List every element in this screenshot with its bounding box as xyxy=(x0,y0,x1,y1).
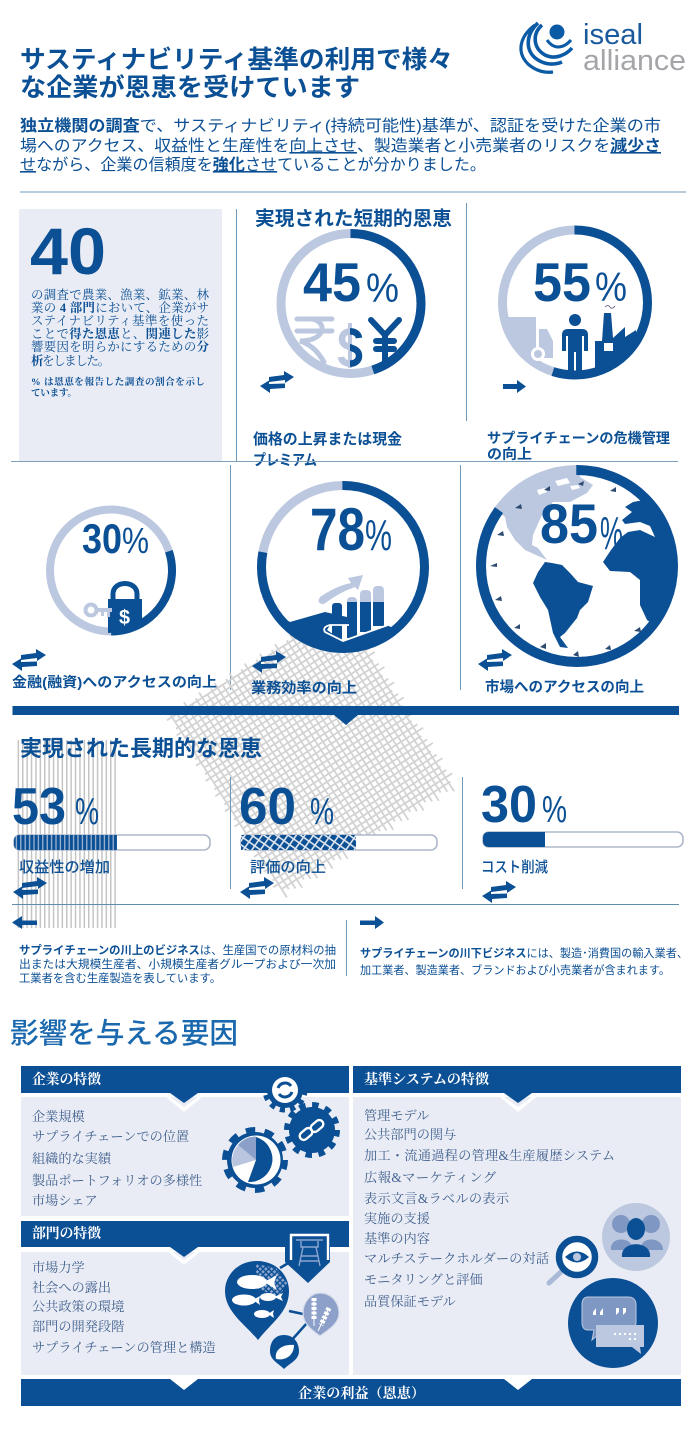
footer banner: company benefits xyxy=(21,1379,681,1406)
list: サプライチェーンの管理と構造 xyxy=(32,1339,216,1355)
icon: lock and key: $ xyxy=(119,607,130,629)
percent note xyxy=(31,376,205,399)
list xyxy=(32,1259,216,1355)
panel: standards system characteristics xyxy=(353,1066,681,1375)
text: upstream definition xyxy=(19,943,336,985)
intro text: 独立機関の調査 で、サスティナビリティ(持続可能性)基準が、認証を受けた企業の市 xyxy=(20,116,661,135)
stat: 60 percent reputation: % xyxy=(310,791,334,833)
chart: 55 percent xyxy=(500,230,648,380)
label: price premium: 価格の上昇または現金 xyxy=(253,430,402,448)
text: upstream definition: 出または大規模生産者、小規模生産者グループおよび一次加 xyxy=(19,957,336,971)
logo: iseal alliance: alliance xyxy=(583,45,686,77)
stat: 60 percent reputation: 60 xyxy=(239,778,296,836)
chart: 45 percent: % xyxy=(366,265,399,311)
study description xyxy=(31,287,210,368)
arrow: downstream xyxy=(360,916,384,929)
label: market access: 市場へのアクセスの向上 xyxy=(485,678,644,696)
header: 企業の特徴 xyxy=(32,1071,101,1088)
text: downstream definition: 加工業者、製造業者、ブランドおよび小売業者が含まれます。 xyxy=(360,963,670,977)
icon: sector pins xyxy=(225,1235,339,1369)
stat: 60 percent reputation: 評価の向上 xyxy=(250,859,326,876)
map: arctic islands xyxy=(537,478,580,495)
stat: 53 percent profitability: % xyxy=(75,791,99,833)
decorative grid: vertical lines xyxy=(17,740,117,928)
map: africa and europe xyxy=(603,500,668,622)
list xyxy=(364,1108,615,1309)
arrow: both directions xyxy=(478,649,512,671)
chart: 45 percent: 45 xyxy=(303,251,361,313)
label: operational efficiency: 業務効率の向上 xyxy=(251,679,357,697)
text: downstream definition: サプライチェーンの川下ビジネスには、製造･消費国の輸入業者、 xyxy=(360,946,688,960)
text: upstream definition: サプライチェーンの川上のビジネスは、生産国での原材料の抽 xyxy=(19,943,336,957)
logo: iseal alliance xyxy=(521,19,686,77)
label: price premium: プレミアム xyxy=(253,452,317,469)
icon: speech bubbles xyxy=(568,1278,658,1368)
chart: 78 percent xyxy=(262,486,430,670)
list: 製品ポートフォリオの多様性 xyxy=(32,1172,202,1188)
stat: 30 percent cost reduction xyxy=(481,776,683,876)
arrow: both directions xyxy=(13,877,47,899)
list: 市場シェア xyxy=(32,1192,98,1208)
label: supply chain risk xyxy=(487,430,670,462)
arrow: both directions xyxy=(252,651,286,673)
intro text: せながら、企業の信頼度を強化させていることが分かりました。 xyxy=(20,156,486,174)
label: price premium xyxy=(253,430,402,469)
label: supply chain risk: の向上 xyxy=(487,446,532,462)
arrow: downstream xyxy=(503,380,526,393)
list: 公共政策の環境 xyxy=(32,1298,124,1314)
study description: ことで得た恩恵と、関連した影 xyxy=(31,326,210,341)
study description: の調査で農業、漁業、鉱業、林 xyxy=(31,287,210,302)
list: 市場力学 xyxy=(32,1259,85,1275)
header: 部門の特徴 xyxy=(32,1225,101,1242)
study description: 響要因を明らかにするための分 xyxy=(31,339,210,354)
map: markers xyxy=(490,481,641,657)
list: 社会への露出 xyxy=(32,1280,111,1295)
map: north america xyxy=(502,475,593,560)
chart: 30 percent xyxy=(34,494,188,647)
icon: stakeholders xyxy=(602,1203,670,1271)
text: downstream definition xyxy=(360,946,688,977)
intro text: 場へのアクセス、収益性と生産性を 向上させ、製造業者と小売業者のリスクを 減少さ xyxy=(20,137,661,155)
chart: 45 percent xyxy=(281,234,421,374)
title: な企業が恩恵を受けています xyxy=(20,73,360,102)
icon: hand and growth bars xyxy=(287,575,392,644)
arrow: both directions xyxy=(240,877,274,899)
list: 広報&マーケティング xyxy=(364,1169,497,1185)
list xyxy=(32,1108,202,1208)
footer banner: company benefits: 企業の利益（恩恵） xyxy=(298,1385,425,1402)
chart: 85 percent globe: % xyxy=(600,507,623,559)
list: 品質保証モデル xyxy=(364,1294,456,1309)
list: 企業規模 xyxy=(32,1108,85,1124)
stat: 53 percent profitability xyxy=(12,778,210,876)
label: supply chain risk: サプライチェーンの危機管理 xyxy=(487,430,670,446)
panel: 40 studies xyxy=(19,209,222,462)
heading: influencing factors: 影響を与える要因 xyxy=(10,1018,238,1050)
list: 実施の支援 xyxy=(364,1210,430,1226)
list: 部門の開発段階 xyxy=(32,1318,124,1334)
logo: iseal alliance: iseal xyxy=(583,19,643,51)
intro text xyxy=(20,116,661,174)
arrow: both directions xyxy=(12,649,46,671)
stat: 53 percent profitability: 53 xyxy=(12,778,66,836)
icon: lock and key xyxy=(86,584,142,633)
number 40: 40 xyxy=(30,214,106,288)
header: 基準システムの特徴 xyxy=(364,1071,489,1088)
percent note: ています。 xyxy=(31,388,77,399)
list: 加工・流通過程の管理&生産履歴システム xyxy=(364,1147,615,1163)
stat: 53 percent profitability: 収益性の増加 xyxy=(19,858,110,876)
list: マルチステークホルダーの対話 xyxy=(364,1250,549,1266)
arrow: upstream xyxy=(12,916,37,929)
list: モニタリングと評価 xyxy=(364,1272,483,1287)
list: サプライチェーンでの位置 xyxy=(32,1129,189,1144)
chart: 30 percent: 30 xyxy=(82,515,122,562)
icon: gears xyxy=(225,1070,337,1190)
chart: 78 percent: 78 xyxy=(310,496,365,563)
list: 公共部門の関与 xyxy=(364,1126,456,1142)
percent note: % は恩恵を報告した調査の割合を示し xyxy=(31,376,205,388)
chart: 55 percent: % xyxy=(595,264,627,310)
chart: 55 percent: 55 xyxy=(533,251,591,313)
icon: truck, worker, factory xyxy=(508,313,636,370)
study description: 業の 4 部門において、企業がサ xyxy=(31,300,209,315)
chart: 30 percent: % xyxy=(122,520,149,561)
map: south america xyxy=(533,562,593,648)
stat: 60 percent reputation xyxy=(239,778,437,876)
list: 管理モデル xyxy=(364,1108,429,1123)
study description: 析をしました。 xyxy=(31,353,110,368)
study description: ステイナビリティ基準を使った xyxy=(31,313,209,328)
banner bar with pointer xyxy=(12,706,679,725)
decorative grid: rotated weave xyxy=(164,601,461,901)
stat: 30 percent cost reduction: コスト削減 xyxy=(481,859,548,876)
heading: long-term benefits: 実現された長期的な恩恵 xyxy=(20,736,262,761)
arrow: both directions xyxy=(482,881,516,903)
list: 組織的な実績 xyxy=(32,1150,112,1166)
list: 基準の内容 xyxy=(364,1230,430,1246)
panel: sector characteristics xyxy=(21,1221,349,1375)
chart: 78 percent: % xyxy=(365,511,392,560)
stat: 30 percent cost reduction: % xyxy=(542,789,567,831)
icon: magnifier with eye xyxy=(549,1239,595,1283)
text: upstream definition: 工業者を含む生産製造を表しています。 xyxy=(19,971,221,985)
chart: 85 percent globe: 85 xyxy=(540,492,598,555)
label: finance access: 金融(融資)へのアクセスの向上 xyxy=(12,674,217,690)
icon: smoke xyxy=(605,306,615,308)
heading: short-term benefits: 実現された短期的恩恵 xyxy=(255,208,452,230)
title: サスティナビリティ基準の利用で様々 xyxy=(20,46,453,74)
panel: company characteristics xyxy=(21,1066,349,1216)
list: 表示文言&ラベルの表示 xyxy=(364,1190,510,1206)
arrow: both directions xyxy=(260,371,294,393)
stat: 30 percent cost reduction: 30 xyxy=(481,776,537,834)
title xyxy=(20,46,453,102)
icon: currency xyxy=(297,319,399,368)
chart: 85 percent globe xyxy=(481,460,690,662)
